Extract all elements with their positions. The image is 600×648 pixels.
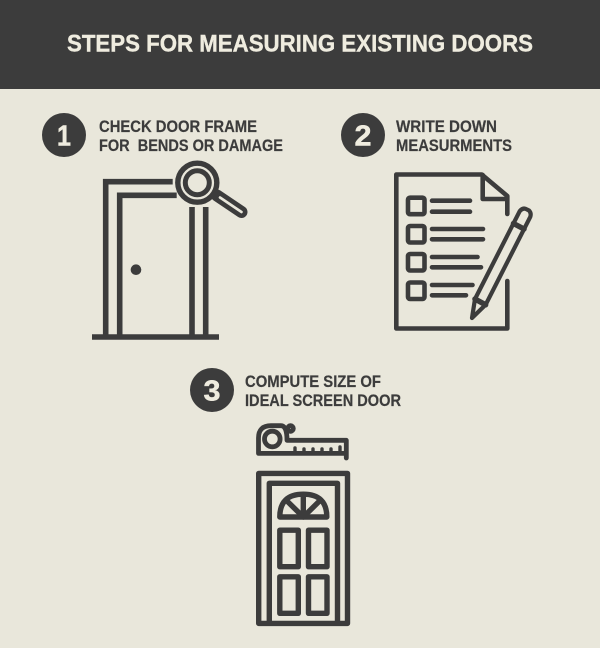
- icon: door frame with magnifying glass: [92, 163, 242, 337]
- title: STEPS FOR MEASURING EXISTING DOORS: [67, 30, 533, 58]
- step 3 badge: [190, 368, 234, 412]
- step 3 text: COMPUTE SIZE OF: [245, 373, 381, 391]
- step 2 badge: [341, 113, 385, 157]
- icon: checklist with pencil: [396, 174, 531, 328]
- step 2 text: WRITE DOWN: [396, 118, 497, 136]
- step 1 text: [99, 118, 283, 155]
- step 3 text: IDEAL SCREEN DOOR: [245, 392, 401, 410]
- step 3 badge: 3: [204, 376, 220, 408]
- icon: front door: [259, 473, 348, 623]
- icon: tape measure: [258, 426, 346, 458]
- step 2 badge: 2: [354, 120, 372, 152]
- step 3 text: [245, 373, 401, 410]
- header band: [0, 0, 600, 89]
- step 2 text: [396, 118, 512, 155]
- step 1 text: FOR BENDS OR DAMAGE: [99, 137, 283, 155]
- step 2 text: MEASURMENTS: [396, 137, 512, 155]
- step 1 text: CHECK DOOR FRAME: [99, 118, 257, 136]
- icon: pencil: [472, 209, 531, 318]
- step 1 badge: 1: [57, 120, 71, 152]
- step 1 badge: [42, 113, 86, 157]
